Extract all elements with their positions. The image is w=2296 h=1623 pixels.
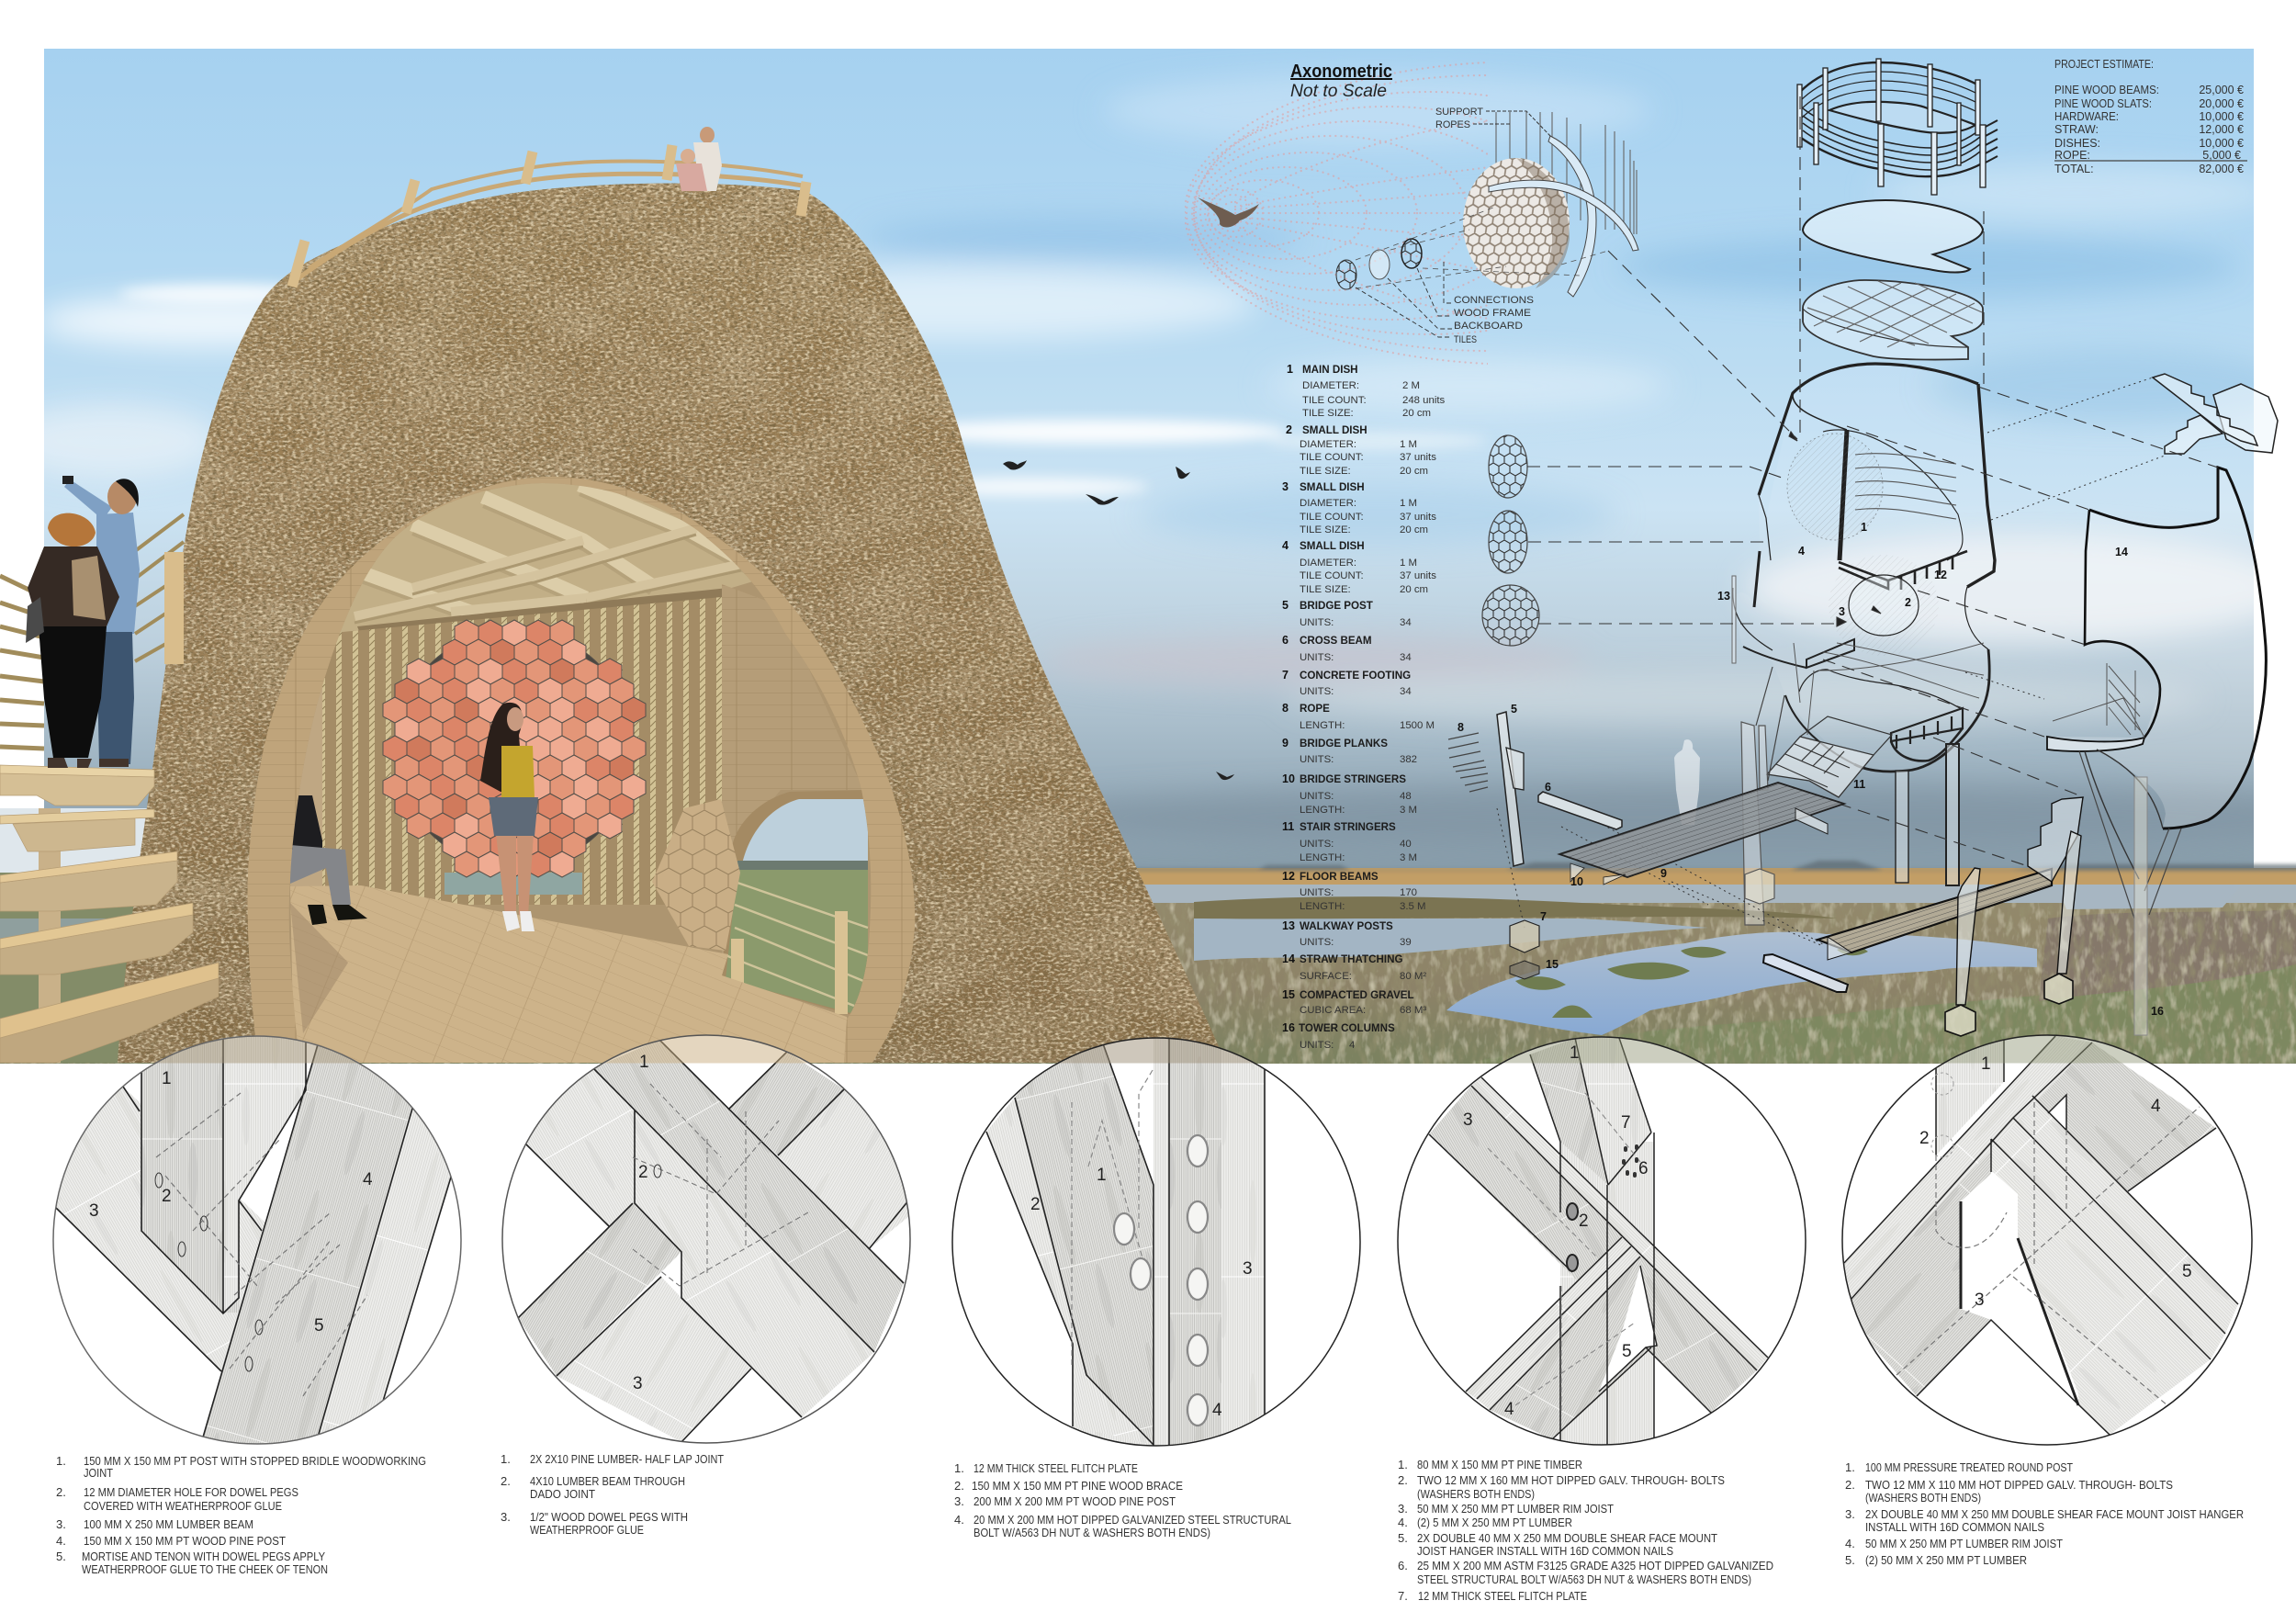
text block: quantities schedule: CROSS BEAM [1300, 635, 1372, 647]
text block: detail 4 notes: TWO 12 MM X 160 MM HOT DIPPED GALV. THROUGH- BOLTS [1417, 1473, 1725, 1487]
text block: quantities schedule: LENGTH: [1300, 901, 1345, 912]
text block: detail 4 notes: 6. [1398, 1559, 1408, 1572]
icon: exploded straw shell [2047, 468, 2266, 1035]
text block: detail 1 notes: 1. [56, 1454, 66, 1468]
text block: axonometric part numbers: 7 [1540, 910, 1547, 923]
panel: timber rim of opening [247, 477, 915, 1063]
text block: quantities schedule: BRIDGE PLANKS [1300, 738, 1388, 750]
panel: detail circle 4: 6 [1638, 1159, 1649, 1178]
panel: detail circle 2: 3 [633, 1374, 643, 1393]
text block: axonometric part numbers: 1 [1861, 521, 1867, 534]
text block: quantities schedule: CUBIC AREA: [1300, 1005, 1366, 1016]
text block: axonometric part numbers: 2 [1905, 596, 1911, 609]
text block: project estimate: 5,000 € [2202, 149, 2241, 162]
text block: quantities schedule: 6 [1282, 634, 1289, 647]
text block: detail 3 notes: 20 MM X 200 MM HOT DIPPED GALVANIZED STEEL STRUCTURAL [974, 1513, 1291, 1527]
panel: detail circle 4: 3 [1463, 1110, 1473, 1130]
text block: detail 2 notes: 2. [501, 1474, 511, 1488]
text block: project estimate: HARDWARE: [2054, 110, 2119, 123]
icon: exploded tile, backboard and frame hexes [1336, 239, 1452, 337]
text block: axonometric part numbers: 4 [1798, 545, 1805, 558]
text block: detail 4 notes: (WASHERS BOTH ENDS) [1417, 1487, 1535, 1501]
text block: quantities schedule: 12 [1282, 870, 1295, 883]
text block: quantities schedule: 2 M [1402, 380, 1420, 391]
text block: quantities schedule: UNITS: [1300, 791, 1334, 802]
text block: detail 3 notes [954, 1461, 1291, 1539]
text block: detail 2 notes [501, 1452, 724, 1537]
text block: quantities schedule: BRIDGE POST [1300, 600, 1373, 612]
icon: human scale figure [1674, 739, 1700, 825]
panel: landscape view through opening [722, 790, 868, 1020]
arrow: exploded view dashed connectors [1497, 96, 2218, 946]
text block: detail 4 notes: 25 MM X 200 MM ASTM F3125 GRADE A325 HOT DIPPED GALVANIZED [1417, 1559, 1773, 1572]
text block: quantities schedule: 34 [1400, 652, 1412, 663]
text block: detail 4 notes: 12 MM THICK STEEL FLITCH PLATE [1418, 1589, 1587, 1603]
text block: quantities schedule: UNITS: [1300, 1040, 1334, 1051]
text block: quantities schedule: TILE COUNT: [1300, 512, 1364, 523]
text block: quantities schedule: 5 [1282, 599, 1289, 612]
panel: left stair and rope rail [0, 576, 219, 1063]
text block: project estimate: 10,000 € [2199, 137, 2244, 150]
icon: rooftop rail with rope [292, 145, 806, 287]
text block: project estimate: ROPE: [2054, 149, 2090, 162]
text block: axonometric part numbers: 13 [1717, 590, 1730, 603]
icon: lower bridge with stair and posts [1763, 797, 2083, 1036]
text block: detail 3 notes: 4. [954, 1513, 964, 1527]
icon: large tiled dish with support ropes and ribs [1356, 112, 1638, 297]
panel: detail circle 1: 5 [314, 1316, 324, 1336]
text block: detail 2 notes: 4X10 LUMBER BEAM THROUGH [530, 1474, 685, 1488]
panel: detail circle 5 [1837, 1029, 2259, 1451]
text block: axonometric part numbers: 15 [1546, 958, 1559, 971]
text block: dish part labels: BACKBOARD [1454, 321, 1523, 332]
panel: landscape seen behind left stair [0, 808, 156, 1063]
text block: quantities schedule: 1 M [1400, 439, 1417, 450]
text block: detail 4 notes: 2X DOUBLE 40 MM X 250 MM DOUBLE SHEAR FACE MOUNT [1417, 1531, 1717, 1545]
text block: quantities schedule: WALKWAY POSTS [1300, 920, 1393, 932]
text block: quantities schedule: UNITS: [1300, 754, 1334, 765]
text block: detail 1 notes: 2. [56, 1485, 66, 1499]
text block: detail 2 notes: 3. [501, 1510, 511, 1524]
text block: project estimate: 25,000 € [2199, 84, 2244, 96]
panel: detail circle 3 [946, 1029, 1368, 1460]
icon: people on rooftop [676, 127, 722, 191]
panel: detail circle 4: 1 [1570, 1043, 1580, 1063]
text block: detail 1 notes: 3. [56, 1517, 66, 1531]
text block: detail 1 notes: 12 MM DIAMETER HOLE FOR DOWEL PEGS [84, 1485, 298, 1499]
panel: detail circle 4 [1391, 1029, 1814, 1460]
text block: quantities schedule: SMALL DISH [1300, 540, 1365, 552]
text block: quantities schedule: 16 [1282, 1021, 1295, 1034]
panel: detail circle 2: 1 [639, 1053, 649, 1072]
text block: quantities schedule: UNITS: [1300, 652, 1334, 663]
text block: dish part labels: CONNECTIONS [1454, 295, 1534, 306]
panel: marsh landscape [0, 861, 2296, 1064]
text block: project estimate: STRAW: [2054, 123, 2099, 136]
panel: detail circle 4: 4 [1504, 1400, 1514, 1419]
text block: detail 2 notes: 1. [501, 1452, 511, 1466]
text block: quantities schedule: 48 [1400, 791, 1412, 802]
text block: detail 1 notes: 4. [56, 1534, 66, 1548]
text block: quantities schedule: 170 [1400, 887, 1417, 898]
text block: quantities schedule: 7 [1282, 669, 1289, 682]
text block: axonometric part numbers: 6 [1545, 781, 1551, 794]
text block: quantities schedule: DIAMETER: [1300, 558, 1356, 569]
text block: quantities schedule: 14 [1282, 952, 1295, 965]
text block: project estimate: TOTAL: [2054, 163, 2094, 175]
text block: detail 5 notes: 100 MM PRESSURE TREATED ROUND POST [1865, 1460, 2073, 1474]
text block: quantities schedule: 40 [1400, 839, 1412, 850]
text block: quantities schedule: FLOOR BEAMS [1300, 871, 1379, 883]
text block: axonometric part numbers: 10 [1570, 875, 1583, 888]
text block: quantities schedule: DIAMETER: [1302, 380, 1359, 391]
text block: quantities schedule: 4 [1282, 539, 1289, 552]
panel: detail circle 1: 3 [89, 1201, 99, 1221]
text block: quantities schedule: 1500 M [1400, 720, 1435, 731]
text block: detail 3 notes: 1. [954, 1461, 964, 1475]
text block: detail 5 notes: TWO 12 MM X 110 MM HOT DIPPED GALV. THROUGH- BOLTS [1865, 1478, 2173, 1492]
title: Axonometric, not to scale [1290, 62, 1392, 101]
text block: quantities schedule: UNITS: [1300, 887, 1334, 898]
text block: quantities schedule: 4 [1349, 1040, 1355, 1051]
text block: quantities schedule: TILE SIZE: [1302, 408, 1354, 419]
text block: quantities schedule: LENGTH: [1300, 805, 1345, 816]
text block: quantities schedule: TILE COUNT: [1300, 452, 1364, 463]
text block: detail 4 notes: 5. [1398, 1531, 1408, 1545]
text block: detail 5 notes [1845, 1460, 2244, 1567]
text block: detail 5 notes: (2) 50 MM X 250 MM PT LUMBER [1865, 1553, 2027, 1567]
text block: detail 4 notes: 80 MM X 150 MM PT PINE TIMBER [1417, 1458, 1582, 1471]
panel: detail circle 3: 3 [1243, 1259, 1253, 1279]
text block: detail 5 notes: 4. [1845, 1537, 1855, 1550]
icon: exploded floor grid [1803, 280, 1983, 360]
text block: axonometric part numbers: 3 [1839, 605, 1845, 618]
panel: detail circle 5: 4 [2151, 1097, 2161, 1116]
text block: project estimate: DISHES: [2054, 137, 2100, 150]
text block: quantities schedule: 9 [1282, 737, 1289, 750]
text block: axonometric part numbers: 8 [1458, 721, 1464, 734]
text block: quantities schedule: 2 [1286, 423, 1292, 436]
text block: axonometric part numbers: 16 [2151, 1005, 2164, 1018]
text block: project estimate: PINE WOOD BEAMS: [2054, 84, 2159, 96]
text block: detail 2 notes: 1/2" WOOD DOWEL PEGS WITH [530, 1510, 688, 1524]
text block: project estimate: 12,000 € [2199, 123, 2244, 136]
text block: quantities schedule: CONCRETE FOOTING [1300, 670, 1411, 682]
panel: detail circle 5: 5 [2182, 1262, 2192, 1281]
panel: wooden floor [290, 885, 854, 1065]
text block: detail 1 notes: 100 MM X 250 MM LUMBER BEAM [84, 1517, 253, 1531]
text block: detail 4 notes: 3. [1398, 1502, 1408, 1516]
text block: quantities schedule: 20 cm [1400, 584, 1428, 595]
text block: detail 1 notes: 5. [56, 1550, 66, 1563]
chart: bird sound wave focus lines [1185, 62, 1488, 366]
text block: quantities schedule: 20 cm [1400, 466, 1428, 477]
text block: detail 4 notes: (2) 5 MM X 250 MM PT LUMBER [1417, 1516, 1572, 1529]
panel: detail circle 4: 5 [1622, 1342, 1632, 1361]
icon: bird in focus of dish [1198, 197, 1259, 227]
text block: detail 1 notes: 150 MM X 150 MM PT POST WITH STOPPED BRIDLE WOODWORKING [84, 1454, 426, 1468]
icon: seated man [290, 795, 367, 925]
text block: detail 4 notes: JOIST HANGER INSTALL WITH 16D COMMON NAILS [1417, 1544, 1673, 1558]
text block: axonometric part numbers [1458, 521, 2164, 1018]
text block: detail 5 notes: 5. [1845, 1553, 1855, 1567]
icon: visitors with camera on left stair [26, 476, 184, 768]
text block: detail 5 notes: 2X DOUBLE 40 MM X 250 MM DOUBLE SHEAR FACE MOUNT JOIST HANGER [1865, 1507, 2244, 1521]
text block: quantities schedule: TILE COUNT: [1300, 570, 1364, 581]
panel: detail circle 4: 2 [1579, 1212, 1589, 1231]
icon: exploded top railing [1797, 59, 1998, 195]
text block: dish part labels: SUPPORT [1435, 107, 1483, 118]
text block: detail 5 notes: 50 MM X 250 MM PT LUMBER RIM JOIST [1865, 1537, 2063, 1550]
text block: quantities schedule: ROPE [1300, 703, 1330, 715]
text block: detail 4 notes: STEEL STRUCTURAL BOLT W/A563 DH NUT & WASHERS BOTH ENDS) [1417, 1572, 1751, 1586]
text block: quantities schedule: STAIR STRINGERS [1300, 821, 1396, 833]
text block: quantities schedule: 3.5 M [1400, 901, 1425, 912]
text block: quantities schedule: 34 [1400, 617, 1412, 628]
text block: quantities schedule: MAIN DISH [1302, 364, 1358, 376]
text block: dish part labels: TILES [1454, 334, 1477, 345]
panel: detail circle 1: 4 [363, 1170, 373, 1189]
text block: axonometric part numbers: 12 [1934, 569, 1947, 581]
panel: detail circle 5: 3 [1975, 1291, 1985, 1310]
text block: project estimate [2054, 58, 2247, 175]
text block: quantities schedule: 39 [1400, 937, 1412, 948]
text block: quantities schedule: UNITS: [1300, 937, 1334, 948]
text block: detail 5 notes: (WASHERS BOTH ENDS) [1865, 1491, 1981, 1505]
text block: detail 1 notes: COVERED WITH WEATHERPROOF GLUE [84, 1499, 282, 1513]
panel: thatched pavilion exterior [118, 184, 1226, 1063]
text block: quantities schedule: TILE SIZE: [1300, 466, 1351, 477]
text block: quantities schedule: 3 M [1400, 805, 1417, 816]
icon: flying birds [1003, 460, 1234, 780]
text block: detail 5 notes: 2. [1845, 1478, 1855, 1492]
text block: quantities schedule: BRIDGE STRINGERS [1300, 773, 1406, 785]
text block: quantities schedule: 10 [1282, 772, 1295, 785]
text block: quantities schedule: TILE SIZE: [1300, 584, 1351, 595]
text block: detail 3 notes: 150 MM X 150 MM PT PINE WOOD BRACE [972, 1479, 1183, 1493]
text block: detail 5 notes: 1. [1845, 1460, 1855, 1474]
text block: quantities schedule [1282, 363, 1446, 1051]
text block: detail 4 notes [1398, 1458, 1773, 1603]
text block: quantities schedule: 1 M [1400, 558, 1417, 569]
panel: sky background [0, 49, 2296, 885]
text block: detail 2 notes: 2X 2X10 PINE LUMBER- HALF LAP JOINT [530, 1452, 724, 1466]
text block: axonometric part numbers: 5 [1511, 703, 1517, 716]
panel: detail circle 2: 2 [638, 1163, 648, 1182]
text block: quantities schedule: DIAMETER: [1300, 498, 1356, 509]
panel: detail circle 5: 2 [1919, 1129, 1930, 1148]
text block: project estimate: PROJECT ESTIMATE: [2054, 58, 2154, 71]
text block: detail 1 notes: 150 MM X 150 MM PT WOOD PINE POST [84, 1534, 286, 1548]
text block: detail 1 notes: WEATHERPROOF GLUE TO THE CHEEK OF TENON [82, 1562, 328, 1576]
text block: quantities schedule: TILE SIZE: [1300, 524, 1351, 535]
icon: main terracotta hexagonal dish [383, 620, 646, 877]
text block: quantities schedule: 13 [1282, 919, 1295, 932]
panel: interior of pavilion [288, 483, 871, 1063]
text block: quantities schedule: LENGTH: [1300, 852, 1345, 863]
text block: quantities schedule: 37 units [1400, 452, 1436, 463]
icon: main bridge deck and stair [1559, 783, 1844, 885]
panel: detail circle 5: 1 [1981, 1054, 1991, 1074]
icon: exploded tower body with dishes and stairs [1732, 364, 1995, 925]
text block: detail 3 notes: 12 MM THICK STEEL FLITCH PLATE [974, 1461, 1138, 1475]
panel: detail circle 2 [496, 1029, 918, 1451]
text block: quantities schedule: DIAMETER: [1300, 439, 1356, 450]
text block: detail 4 notes: 50 MM X 250 MM PT LUMBER RIM JOIST [1417, 1502, 1614, 1516]
text block: detail 5 notes: 3. [1845, 1507, 1855, 1521]
panel: detail circle 1 [52, 1035, 462, 1445]
text block: detail 3 notes: BOLT W/A563 DH NUT & WASHERS BOTH ENDS) [974, 1526, 1210, 1539]
text block: axonometric part numbers: 9 [1660, 867, 1667, 880]
text block: detail 1 notes: MORTISE AND TENON WITH DOWEL PEGS APPLY [82, 1550, 325, 1563]
text block: quantities schedule: 34 [1400, 686, 1412, 697]
panel: detail circle 4: 7 [1621, 1113, 1631, 1133]
text block: project estimate: 82,000 € [2199, 163, 2244, 175]
icon: standing woman [480, 703, 538, 931]
text block: project estimate: 10,000 € [2199, 110, 2244, 123]
text block: quantities schedule: UNITS: [1300, 686, 1334, 697]
text block: quantities schedule: 20 cm [1402, 408, 1431, 419]
text block: quantities schedule: 8 [1282, 702, 1289, 715]
text block: detail 2 notes: DADO JOINT [530, 1487, 595, 1501]
text block: quantities schedule: 80 M² [1400, 971, 1426, 982]
text block: detail 4 notes: 2. [1398, 1473, 1408, 1487]
panel: detail circle 3: 2 [1030, 1195, 1041, 1214]
icon: exploded upper stair [2153, 374, 2278, 454]
text block: detail 1 notes: JOINT [84, 1466, 113, 1480]
text block: quantities schedule: 382 [1400, 754, 1417, 765]
text block: axonometric part numbers: 11 [1853, 778, 1865, 791]
text block: quantities schedule: 15 [1282, 988, 1295, 1001]
panel: rope curtain [322, 597, 722, 905]
text block: quantities schedule: 20 cm [1400, 524, 1428, 535]
panel: detail circle 3: 1 [1097, 1166, 1107, 1185]
panel: detail circle 1: 2 [162, 1187, 172, 1206]
text block: quantities schedule: TILE COUNT: [1302, 395, 1367, 406]
text block: quantities schedule: STRAW THATCHING [1300, 953, 1403, 965]
icon: bridge post, cross beam, footing and gravel exploded parts [1448, 712, 1622, 979]
text block: quantities schedule: COMPACTED GRAVEL [1300, 989, 1414, 1001]
icon: back side of second dish [652, 799, 740, 951]
text block: dish part labels: ROPES [1435, 119, 1470, 130]
text block: quantities schedule: 37 units [1400, 570, 1436, 581]
text block: quantities schedule: SMALL DISH [1300, 481, 1365, 493]
text block: detail 5 notes: INSTALL WITH 16D COMMON NAILS [1865, 1520, 2044, 1534]
text block: detail 3 notes: 2. [954, 1479, 964, 1493]
text block: quantities schedule: UNITS: [1300, 839, 1334, 850]
text block: quantities schedule: LENGTH: [1300, 720, 1345, 731]
text block: quantities schedule: SURFACE: [1300, 971, 1352, 982]
text block: detail 1 notes [56, 1454, 426, 1576]
panel: detail circle 3: 4 [1212, 1401, 1222, 1420]
text block: quantities schedule: 1 [1287, 363, 1293, 376]
text block: detail 3 notes: 3. [954, 1494, 964, 1508]
text block: quantities schedule: UNITS: [1300, 617, 1334, 628]
panel: coffered ceiling [341, 483, 751, 632]
text block: quantities schedule: 3 [1282, 480, 1289, 493]
text block: dish part labels: WOOD FRAME [1454, 308, 1531, 319]
text block: axonometric part numbers: 14 [2115, 546, 2128, 558]
text block: quantities schedule: 68 M³ [1400, 1005, 1426, 1016]
icon: exploded roof disc [1803, 200, 1983, 272]
text block: project estimate: 20,000 € [2199, 97, 2244, 110]
title: Axonometric, not to scale: Not to Scale [1290, 82, 1387, 101]
text block: detail 3 notes: 200 MM X 200 MM PT WOOD PINE POST [974, 1494, 1176, 1508]
text block: project estimate: PINE WOOD SLATS: [2054, 97, 2152, 110]
text block: quantities schedule: TOWER COLUMNS [1299, 1022, 1395, 1034]
text block: quantities schedule: 11 [1282, 820, 1294, 833]
title: Axonometric, not to scale: Axonometric [1290, 62, 1392, 82]
text block: dish part labels [1435, 107, 1550, 345]
text block: quantities schedule: SMALL DISH [1302, 424, 1367, 436]
text block: detail 4 notes: 7. [1398, 1589, 1408, 1603]
text block: quantities schedule: 3 M [1400, 852, 1417, 863]
text block: quantities schedule: 1 M [1400, 498, 1417, 509]
panel: detail circle 1: 1 [162, 1069, 172, 1088]
icon: small exploded dishes [1482, 435, 1539, 646]
text block: detail 4 notes: 4. [1398, 1516, 1408, 1529]
text block: detail 4 notes: 1. [1398, 1458, 1408, 1471]
text block: quantities schedule: 248 units [1402, 395, 1446, 406]
text block: quantities schedule: 37 units [1400, 512, 1436, 523]
text block: detail 2 notes: WEATHERPROOF GLUE [530, 1523, 644, 1537]
